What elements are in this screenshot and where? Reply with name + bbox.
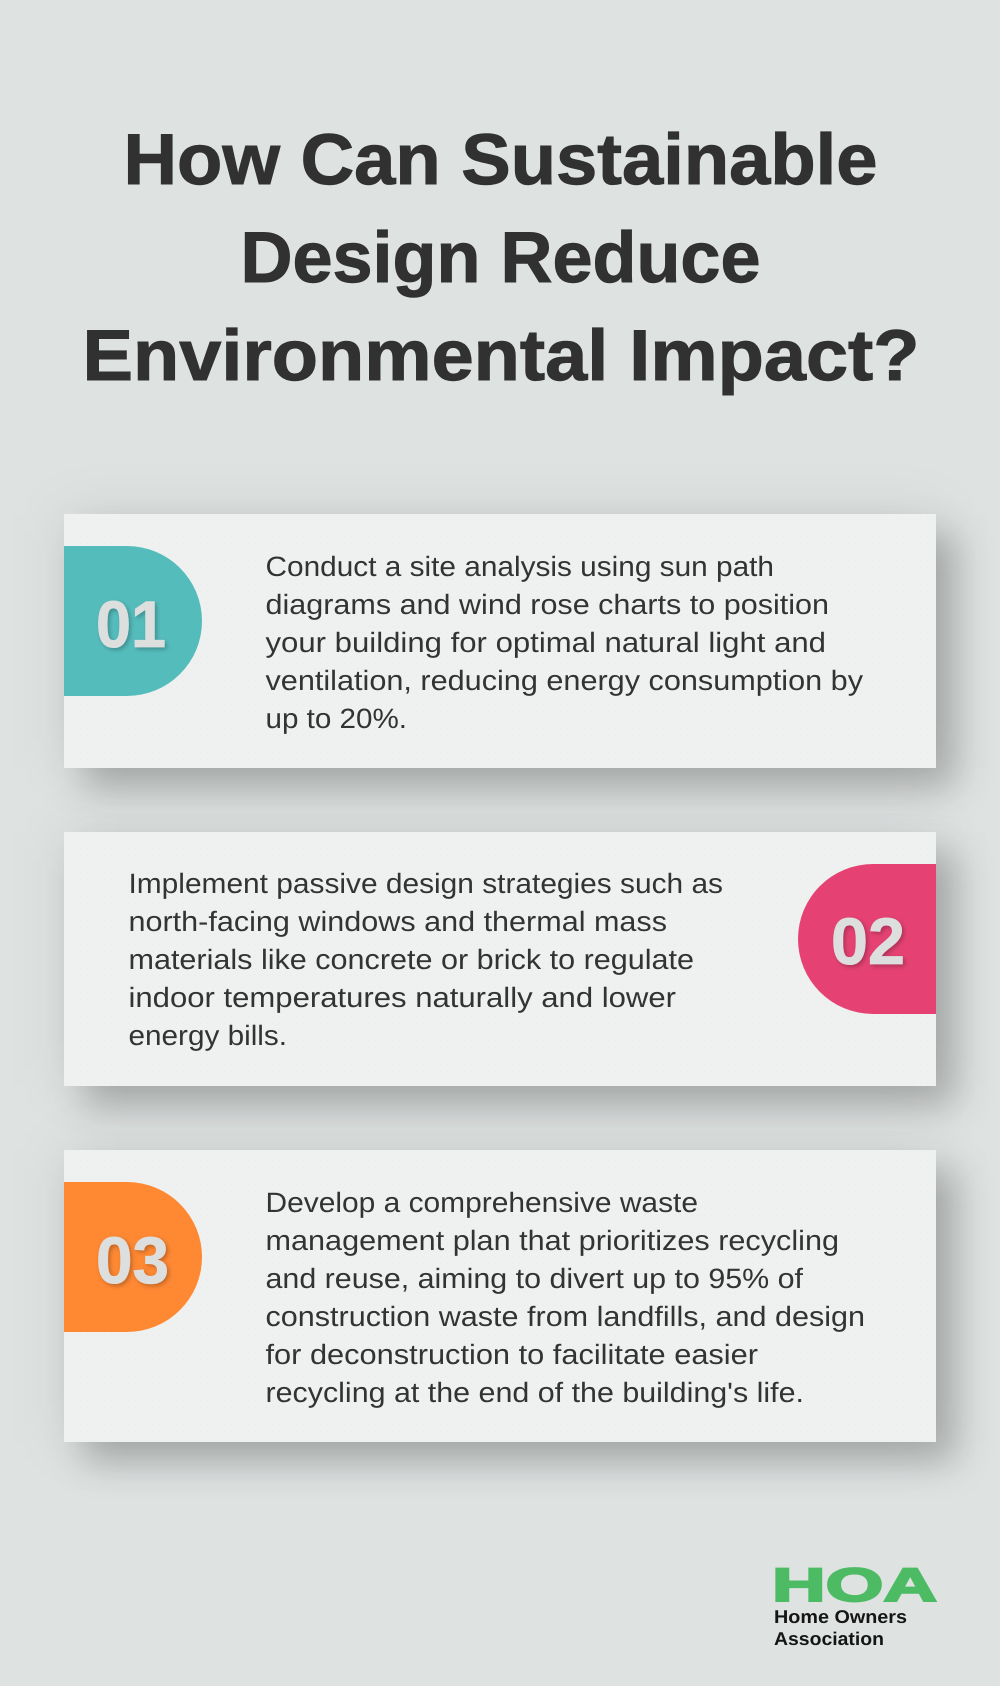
text: step 03 description: recycling at the end of the building's life. [266, 1377, 804, 1408]
title: How Can Sustainable [124, 120, 878, 200]
text: step 03 description [266, 1187, 865, 1408]
panel: step 03 [64, 1150, 956, 1462]
text: step 02 description [128, 868, 723, 1051]
text: step 01 description: Conduct a site analysis using sun path [266, 551, 774, 582]
title [82, 120, 919, 396]
text: step 03 description: construction waste from landfills, and design [266, 1301, 865, 1332]
text: step 01 description: ventilation, reducing energy consumption by [266, 665, 863, 696]
badge: 01: 01 [96, 587, 166, 661]
text: step 02 description: Implement passive design strategies such as [128, 868, 723, 899]
text: step 02 description: materials like concrete or brick to regulate [128, 944, 694, 975]
logo: HOA Home Owners Association: Home Owners [774, 1606, 907, 1627]
badge: 03: 03 [96, 1223, 169, 1297]
panel: step 02 [64, 832, 956, 1106]
text: step 03 description: and reuse, aiming to divert up to 95% of [266, 1263, 803, 1294]
text: step 01 description: diagrams and wind rose charts to position [266, 589, 829, 620]
badge: 02 [798, 864, 936, 1014]
text: step 01 description: your building for optimal natural light and [266, 627, 826, 658]
title: Environmental Impact? [82, 316, 919, 396]
logo: HOA Home Owners Association [772, 1558, 937, 1649]
badge: 02: 02 [831, 904, 905, 978]
text: step 01 description: up to 20%. [266, 703, 407, 734]
title: Design Reduce [240, 218, 760, 298]
text: step 02 description: north-facing windows and thermal mass [128, 906, 667, 937]
logo: HOA Home Owners Association: HOA [772, 1558, 937, 1611]
text: step 03 description: management plan that prioritizes recycling [266, 1225, 839, 1256]
logo: HOA Home Owners Association: Association [774, 1628, 884, 1649]
text: step 03 description: Develop a comprehensive waste [266, 1187, 698, 1218]
text: step 03 description: for deconstruction to facilitate easier [266, 1339, 758, 1370]
text: step 02 description: energy bills. [128, 1020, 287, 1051]
panel: step 01 [64, 514, 956, 788]
badge: 03 [64, 1182, 202, 1332]
badge: 01 [64, 546, 202, 696]
text: step 01 description [266, 551, 863, 734]
text: step 02 description: indoor temperatures naturally and lower [128, 982, 676, 1013]
